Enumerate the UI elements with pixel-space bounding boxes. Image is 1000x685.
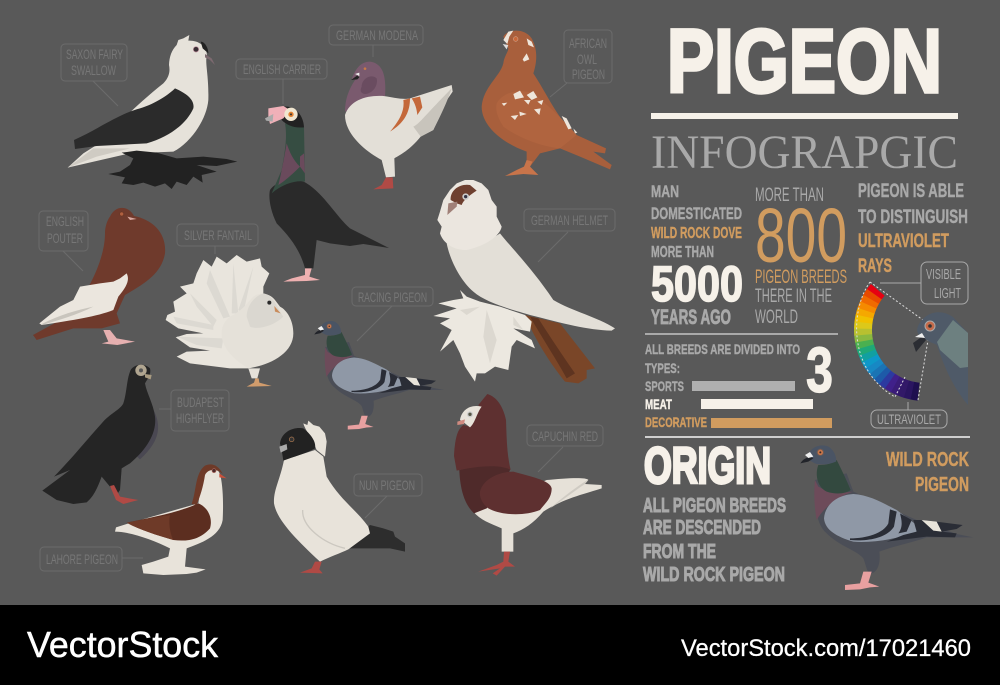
bird: african owl pigeon xyxy=(482,31,612,176)
bird: silver fantail xyxy=(166,255,293,387)
label: saxon fairy swallow xyxy=(61,44,127,106)
label: silver fantail xyxy=(177,224,258,254)
label: capuchin red: CAPUCHIN RED xyxy=(532,428,598,444)
text block: domestication: YEARS AGO xyxy=(651,306,731,329)
label: visible light: VISIBLE xyxy=(926,266,961,283)
footer bar xyxy=(0,605,1000,685)
bird: capuchin red xyxy=(454,394,602,576)
label: saxon fairy swallow: SAXON FAIRY xyxy=(66,46,123,62)
chart: vision spectrum arc xyxy=(837,242,1000,418)
bird: budapest highflyer xyxy=(42,365,158,504)
label: nun pigeon: NUN PIGEON xyxy=(359,477,415,493)
text block: domestication: MORE THAN xyxy=(651,244,714,261)
label: visible light: LIGHT xyxy=(934,285,961,302)
bar chart: breed types: MEAT xyxy=(645,396,672,412)
bird: wild rock pigeon xyxy=(800,445,973,590)
label: ultraviolet: ULTRAVIOLET xyxy=(877,411,941,427)
bird: racing pigeon xyxy=(314,321,444,430)
bird: german helmet xyxy=(433,180,615,383)
text block: breed count xyxy=(755,185,847,328)
bar chart: breed types: 3 xyxy=(806,334,833,406)
text block: breed count: MORE THAN xyxy=(755,185,824,206)
label: african owl pigeon: OWL xyxy=(577,51,597,67)
bar chart: breed types: ALL BREEDS ARE DIVIDED INTO xyxy=(645,341,800,357)
bird: german modena xyxy=(345,62,453,189)
text block: origin description xyxy=(643,495,786,586)
label: silver fantail: SILVER FANTAIL xyxy=(184,227,252,243)
text block: ultraviolet xyxy=(858,181,968,277)
title underline xyxy=(651,113,958,119)
label: english pouter xyxy=(39,211,88,271)
label: german helmet: GERMAN HELMET xyxy=(531,212,608,228)
label: budapest highflyer: HIGHFLYER xyxy=(176,410,224,426)
text block: origin description: WILD ROCK PIGEON xyxy=(643,564,785,586)
text block: origin description: ARE DESCENDED xyxy=(643,517,761,539)
label: wild rock pigeon xyxy=(886,449,969,496)
bird: nun pigeon xyxy=(274,421,405,573)
label: capuchin red xyxy=(527,425,603,472)
bird head viewing spectrum xyxy=(913,312,968,405)
label: budapest highflyer xyxy=(159,390,229,431)
bar chart: breed types: TYPES: xyxy=(645,360,680,376)
text block: breed count: WORLD xyxy=(755,307,798,328)
footer bar: VectorStock.com/17021460 xyxy=(681,635,971,662)
label: wild rock pigeon: WILD ROCK xyxy=(886,449,969,471)
label: english carrier: ENGLISH CARRIER xyxy=(243,61,321,77)
bar chart: breed types: DECORATIVE xyxy=(645,414,707,430)
label: african owl pigeon: PIGEON xyxy=(572,66,605,82)
label: budapest highflyer: BUDAPEST xyxy=(177,394,224,410)
label: ultraviolet xyxy=(871,402,947,428)
text block: breed count: 800 xyxy=(755,193,847,279)
divider xyxy=(645,436,970,438)
heading: origin: ORIGIN xyxy=(644,437,771,494)
text block: origin description: ALL PIGEON BREEDS xyxy=(643,495,786,517)
label: german helmet xyxy=(524,209,615,262)
text block: ultraviolet: RAYS xyxy=(858,256,892,277)
text block: domestication: DOMESTICATED xyxy=(651,204,742,223)
label: racing pigeon: RACING PIGEON xyxy=(358,289,427,305)
subtitle: INFOGRAPGIC: INFOGRAPGIC xyxy=(651,126,958,179)
bird: english pouter xyxy=(33,208,165,345)
label: english pouter: ENGLISH xyxy=(46,213,84,229)
bar chart: breed types xyxy=(645,334,833,430)
label: english carrier xyxy=(236,59,327,104)
text block: domestication xyxy=(651,182,743,329)
label: lahore pigeon xyxy=(40,547,143,571)
text block: origin description: FROM THE xyxy=(643,541,716,563)
bird: saxon fairy swallow xyxy=(68,35,237,189)
label: wild rock pigeon: PIGEON xyxy=(915,474,969,496)
label: african owl pigeon: AFRICAN xyxy=(569,35,607,51)
bar chart: breed types: SPORTS xyxy=(645,378,684,394)
text block: domestication: MAN xyxy=(651,182,679,201)
label: german modena: GERMAN MODENA xyxy=(336,27,418,43)
label: nun pigeon xyxy=(354,474,422,518)
label: lahore pigeon: LAHORE PIGEON xyxy=(46,551,118,567)
text block: ultraviolet: ULTRAVIOLET xyxy=(858,231,949,252)
text block: domestication: 5000 xyxy=(651,256,743,312)
label: racing pigeon xyxy=(352,287,433,341)
label: english pouter: POUTER xyxy=(47,230,83,246)
text block: breed count: THERE IN THE xyxy=(755,286,832,307)
label: german modena xyxy=(329,25,423,57)
text block: breed count: PIGEON BREEDS xyxy=(755,267,847,288)
text block: domestication: WILD ROCK DOVE xyxy=(651,225,742,242)
footer bar: VectorStock xyxy=(27,624,219,665)
bird: lahore pigeon xyxy=(115,464,227,575)
bird: english carrier xyxy=(265,106,389,282)
label: african owl pigeon xyxy=(550,30,612,97)
label: saxon fairy swallow: SWALLOW xyxy=(71,62,116,78)
label: visible light xyxy=(880,262,968,304)
divider xyxy=(645,333,838,335)
